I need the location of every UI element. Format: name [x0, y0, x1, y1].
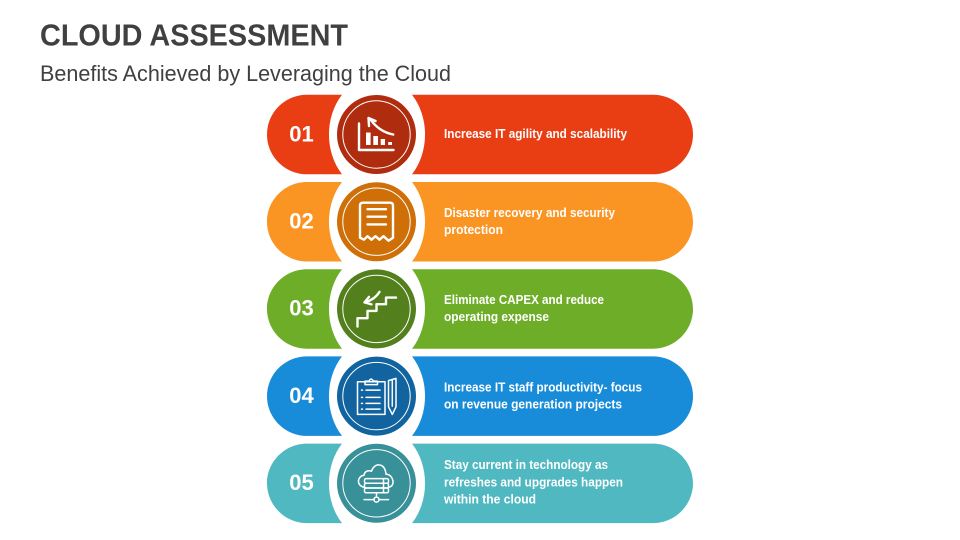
number 05: 05 — [289, 470, 314, 495]
pill left: number segment — [267, 95, 342, 174]
number 01: 01 — [289, 121, 314, 146]
benefit text line 2: operating expense — [444, 309, 549, 324]
benefit text line 2: protection — [444, 222, 503, 237]
icon: declining bar chart with arrow — [359, 118, 394, 150]
inner ring — [343, 101, 410, 168]
row 04: staff productivity — [267, 356, 693, 436]
pill right: text segment — [412, 269, 693, 349]
row 01: IT agility — [267, 95, 693, 174]
row 03: eliminate capex — [267, 269, 693, 349]
pill right: text segment — [412, 95, 693, 174]
inner ring — [343, 450, 410, 517]
number 04: 04 — [289, 383, 314, 408]
benefit text line 2: on revenue generation projects — [444, 396, 622, 411]
icon circle — [337, 269, 416, 348]
benefit text: Increase IT agility and scalability — [444, 126, 628, 141]
benefit text line 3: within the cloud — [443, 492, 536, 507]
icon: cloud server network — [358, 465, 393, 502]
inner ring — [343, 188, 410, 255]
icon circle — [337, 444, 416, 523]
icon: receipt document — [360, 203, 393, 241]
pill left: number segment — [267, 182, 342, 262]
title: CLOUD ASSESSMENT — [40, 18, 348, 52]
benefit text: Stay current in technology as — [444, 457, 608, 472]
icon: stairs with downward arrow — [358, 292, 396, 327]
benefit text line 2: refreshes and upgrades happen — [444, 475, 623, 490]
subtitle: Benefits Achieved by Leveraging the Cloud — [40, 61, 451, 86]
icon circle — [337, 357, 416, 436]
row 02: disaster recovery — [267, 182, 693, 262]
pill right: text segment — [412, 182, 693, 262]
row 05: stay current — [267, 444, 693, 523]
number 03: 03 — [289, 296, 314, 321]
icon circle — [337, 95, 416, 174]
pill left: number segment — [267, 356, 342, 436]
icon circle — [337, 182, 416, 261]
pill left: number segment — [267, 444, 342, 523]
inner ring — [343, 362, 410, 430]
icon: clipboard and pen — [358, 378, 396, 414]
benefit text: Eliminate CAPEX and reduce — [444, 292, 604, 307]
pill right: text segment — [412, 444, 693, 523]
inner ring — [343, 275, 410, 343]
benefit text: Disaster recovery and security — [444, 205, 616, 220]
pill left: number segment — [267, 269, 342, 349]
number 02: 02 — [289, 208, 314, 234]
pill right: text segment — [412, 356, 693, 436]
benefit text: Increase IT staff productivity- focus — [444, 379, 642, 394]
